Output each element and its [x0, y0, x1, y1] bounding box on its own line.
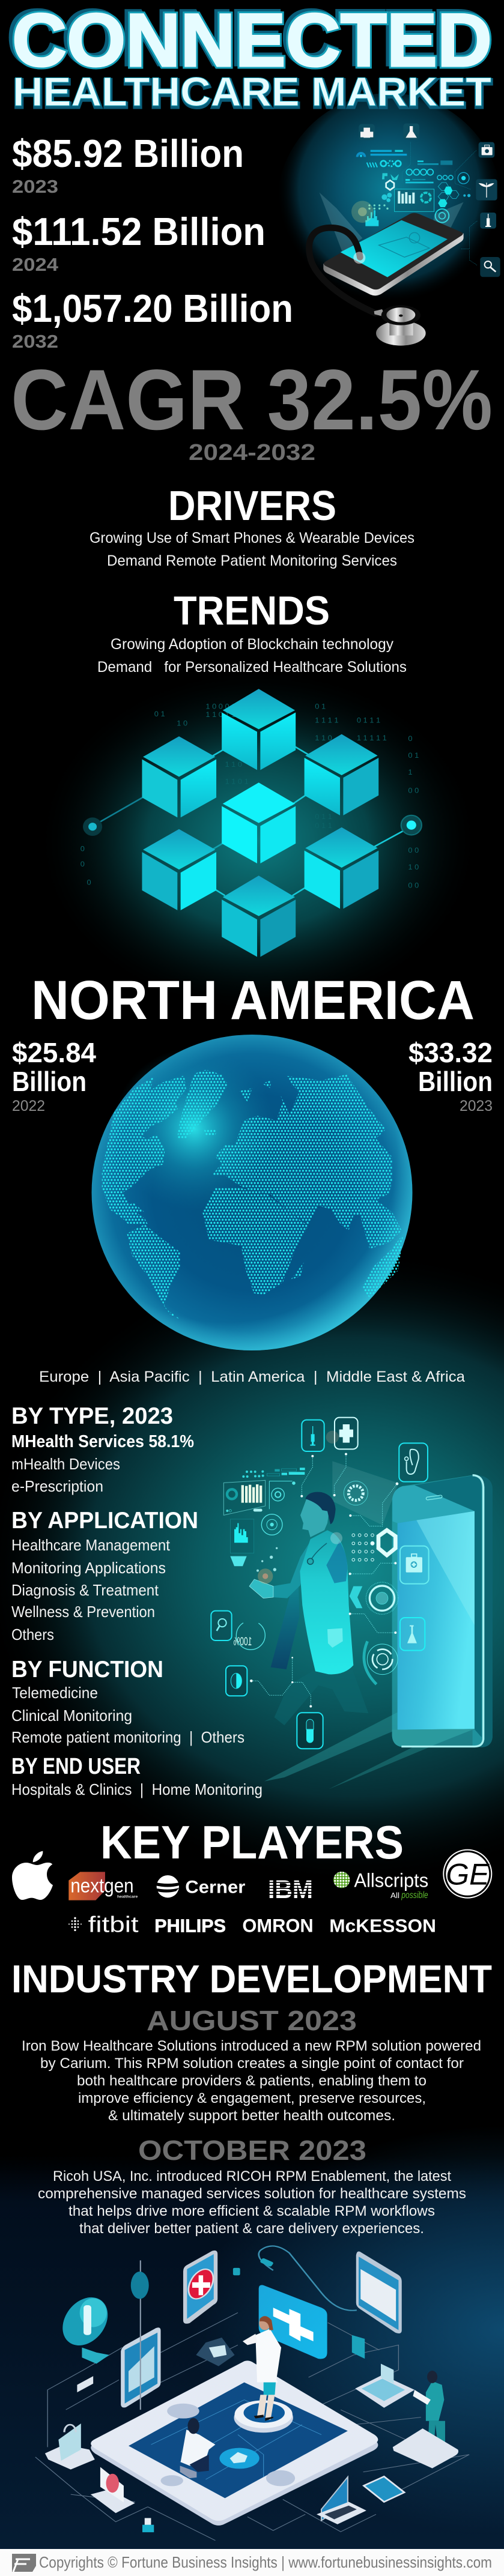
- background glow: phone illustration: [276, 93, 502, 321]
- cube: center: [222, 782, 296, 863]
- tablet platform: [91, 2360, 378, 2526]
- logo: Omron: OMRON: [242, 1915, 314, 1937]
- laptop: [317, 2477, 366, 2524]
- smartphone top face: [324, 213, 463, 289]
- heading: North America: NORTH AMERICA: [31, 970, 475, 1031]
- year 2022: 2022: [12, 1098, 45, 1114]
- icon: syringe: [480, 213, 496, 229]
- segment: e-Prescription: [11, 1477, 103, 1495]
- cube: top: [222, 689, 296, 770]
- August text block: by Carium. This RPM solution creates a single point of contact for: [40, 2055, 464, 2072]
- tablet screen: [129, 2383, 348, 2498]
- footer logo: [12, 2554, 36, 2572]
- title: [8, 0, 492, 116]
- left tablet device: [121, 2327, 160, 2408]
- logo group right: [242, 1850, 491, 1937]
- circuit nodes: [250, 1453, 398, 1708]
- logo: Allscripts: Allscripts: [354, 1870, 428, 1891]
- binary digits: 0 0: [408, 787, 419, 795]
- binary digits: 1 0: [408, 863, 419, 871]
- cube: lower left: [142, 829, 216, 910]
- binary digits: 0: [80, 860, 85, 868]
- icon: half moon: [226, 1666, 247, 1696]
- monitoring device: [196, 2338, 235, 2366]
- illustration: doctor and phone: [211, 1418, 493, 1789]
- binary digits: 1: [408, 768, 413, 776]
- doctor head: [300, 1492, 336, 1537]
- HUD circles: [236, 1481, 398, 1684]
- bar chart panel: [230, 1519, 254, 1553]
- light beams: [320, 193, 362, 252]
- phone glass body: [392, 1475, 485, 1747]
- trend 1: Growing Adoption of Blockchain technology: [111, 636, 393, 653]
- logo: GE: GE: [446, 1858, 490, 1891]
- panel: August 2023 development: [22, 2005, 481, 2124]
- segment: Monitoring Applications: [11, 1559, 166, 1577]
- pedestal: [234, 2400, 293, 2432]
- seated person: [180, 2418, 215, 2478]
- doctor back coat panel: [271, 1577, 299, 1669]
- bottle: [142, 2518, 154, 2532]
- value: North America 2023: [408, 1037, 493, 1114]
- segment: Healthcare Management: [11, 1536, 171, 1554]
- title line: Connected: CONNECTED: [12, 0, 492, 82]
- logo: Apple: [12, 1851, 53, 1900]
- dot matrix: [352, 1534, 374, 1561]
- binary digits: 0 1: [357, 751, 368, 760]
- binary digits: 0: [80, 845, 85, 853]
- icon: caduceus: [476, 179, 497, 201]
- heading: key players: KEY PLAYERS: [100, 1816, 404, 1869]
- tablet shadow spots: [160, 2404, 295, 2486]
- hologram UI elements: [351, 150, 470, 226]
- October text block: Ricoh USA, Inc. introduced RICOH RPM Enablement, the latest: [53, 2168, 451, 2184]
- heading: by type: BY TYPE, 2023: [11, 1403, 173, 1429]
- title line: Connected: CONNECTED: [12, 0, 492, 82]
- phone back edge: [473, 1475, 493, 1747]
- segment: Diagnosis & Treatment: [11, 1581, 159, 1599]
- by application: [11, 1508, 198, 1643]
- date: October 2023: OCTOBER 2023: [138, 2135, 366, 2166]
- dashboard panel: [223, 1480, 266, 1515]
- unit: Billion: [12, 1066, 87, 1097]
- panel: October 2023 development: [38, 2135, 466, 2237]
- CAGR period: 2024-2032: [189, 440, 315, 465]
- doctor legs: [275, 1669, 368, 1725]
- smartphone body: [323, 234, 464, 295]
- year 2023: 2023: [460, 1098, 493, 1114]
- August text block: [22, 2038, 481, 2124]
- logo: NextGen: nextgen: [70, 1875, 134, 1897]
- icon: syringe: [302, 1420, 324, 1451]
- cube: upper right: [305, 734, 378, 815]
- document panel: [356, 2251, 402, 2333]
- illustration: blockchain cubes: [80, 689, 422, 957]
- segment: Others: [11, 1625, 54, 1643]
- title line: Healthcare Market: HEALTHCARE MARKET: [13, 71, 492, 116]
- unit: Billion: [418, 1066, 493, 1097]
- binary digits: 1 1 0: [225, 761, 242, 769]
- node: left: [83, 817, 102, 836]
- October text block: that deliver better patient & care delivery experiences.: [79, 2221, 424, 2237]
- logo: Cerner: [153, 1875, 245, 1897]
- heading: drivers: DRIVERS: [168, 482, 336, 529]
- segment: Telemedicine: [12, 1684, 98, 1702]
- year 2023: 2023: [12, 176, 58, 197]
- background glow: bottom illustration right: [192, 2126, 504, 2534]
- by function: [11, 1657, 244, 1746]
- year 2024: 2024: [12, 254, 59, 275]
- doctor hand: [249, 1579, 273, 1598]
- mark below chart: [230, 1556, 247, 1566]
- icon: stethoscope: [399, 1443, 428, 1482]
- binary digits: 1 1 1 1 1: [357, 734, 387, 742]
- market values: [12, 132, 293, 352]
- October text block: comprehensive managed services solution for healthcare systems: [38, 2186, 466, 2202]
- phone frame highlight: [401, 1475, 484, 1747]
- phone screen: [398, 1511, 475, 1730]
- August text block: both healthcare providers & patients, enabling them to: [77, 2073, 427, 2089]
- stethoscope tubing: [259, 2246, 357, 2311]
- icon: magnifier: [480, 257, 500, 277]
- hexagon gem: [378, 1530, 395, 1555]
- segment: Clinical Monitoring: [11, 1707, 132, 1725]
- logo: Philips: PHILIPS: [154, 1915, 226, 1936]
- phone with red cross: [183, 2251, 218, 2324]
- footer: [0, 2549, 504, 2576]
- segment: Remote patient monitoring | Others: [11, 1728, 244, 1746]
- by type: [11, 1403, 194, 1495]
- icon: medical kit: [400, 1546, 429, 1584]
- binary digits: 0 1: [408, 751, 419, 760]
- logo group left: [12, 1851, 245, 1937]
- C shape mark: [350, 1586, 362, 1608]
- stethoscope chest piece: [374, 305, 426, 346]
- trend 2: Demand for Personalized Healthcare Solutions: [97, 659, 407, 676]
- icon: cross: [335, 1418, 358, 1449]
- leading segment: MHealth Services 58.1%: [11, 1432, 194, 1451]
- logo: Cerner: Cerner: [185, 1877, 245, 1897]
- logo: McKesson: McKESSON: [329, 1915, 436, 1936]
- heading: trends: TRENDS: [174, 588, 330, 633]
- binary digits: 0 1: [315, 703, 326, 710]
- background glow: blockchain: [36, 667, 481, 1015]
- small tablet: [364, 2476, 404, 2502]
- illustration: smartphone with stethoscope: [309, 124, 500, 346]
- footer band: [0, 2549, 504, 2576]
- heading: by end user: BY END USER: [11, 1754, 141, 1779]
- segment: Wellness & Prevention: [11, 1603, 155, 1621]
- binary digits: 0 0: [408, 846, 419, 854]
- illustration: globe: [91, 1035, 412, 1350]
- August text block: & ultimately support better health outcomes.: [108, 2108, 395, 2124]
- binary digits: 0: [87, 878, 91, 887]
- tablet map lines: [151, 2400, 321, 2479]
- small monitor with heart: [91, 2467, 135, 2513]
- circuit lines: [251, 1454, 397, 1707]
- heading: industry development: INDUSTRY DEVELOPMENT: [11, 1957, 492, 2001]
- panel: trends: [97, 588, 407, 676]
- connector lines: [100, 739, 407, 895]
- HUD label: 100%: 100%: [234, 1636, 252, 1648]
- phone top wedge: [392, 1485, 475, 1523]
- nurse platform: [393, 2428, 458, 2469]
- phone bottom glass: [392, 1729, 475, 1747]
- doctor arm: [272, 1541, 311, 1598]
- icon: pill: [297, 1713, 323, 1749]
- other regions list: Europe | Asia Pacific | Latin America | Middle East & Africa: [39, 1368, 465, 1385]
- smartphone screen: [341, 220, 448, 277]
- stethoscope on coat: [308, 1543, 327, 1564]
- logo: Allscripts: All: [390, 1891, 399, 1900]
- panel: segmentation lists: [11, 1403, 263, 1798]
- floor light rays: [264, 1707, 484, 1789]
- globe sphere: [91, 1035, 412, 1350]
- coat sleeve shading: [326, 1541, 347, 1583]
- segment: mHealth Devices: [11, 1455, 120, 1473]
- background: bottom illustration: [0, 2156, 504, 2549]
- binary digits: 0 1 1 1: [357, 716, 380, 724]
- screen highlight: [416, 1511, 475, 1625]
- binary digits: 1 1 0 1 1 0: [205, 710, 242, 719]
- top mini bars: [242, 1468, 305, 1478]
- light ray from phone: [332, 1461, 398, 1525]
- left monitor base: [45, 2423, 95, 2470]
- key player logos: [12, 1850, 491, 1937]
- heading: by application: BY APPLICATION: [11, 1508, 198, 1534]
- title line: Healthcare Market: HEALTHCARE MARKET: [13, 69, 491, 115]
- heading: by function: BY FUNCTION: [11, 1657, 163, 1683]
- binary digits: 0 1 1: [315, 822, 332, 830]
- cube: upper left: [142, 736, 216, 817]
- value: North America 2022: [12, 1037, 96, 1114]
- icon: flask: [403, 124, 419, 139]
- doctor on screen: [379, 232, 430, 257]
- binary digits: 1 1 1 1: [315, 716, 339, 724]
- illustration: connected care platform: [35, 2246, 469, 2541]
- cube: bottom: [222, 875, 296, 957]
- amount 2022: $25.84: [12, 1037, 96, 1068]
- cloud: [55, 2293, 116, 2392]
- IV stand: [131, 2260, 149, 2410]
- binary digits: 0 1 1: [315, 812, 332, 821]
- October text block: [38, 2168, 466, 2237]
- small connectors: [233, 2258, 365, 2359]
- binary digits: 0: [408, 734, 413, 743]
- binary digits: 1 0 0 0 1: [205, 703, 235, 710]
- dotted continents: [102, 1069, 403, 1319]
- date: August 2023: AUGUST 2023: [147, 2005, 357, 2036]
- October text block: that helps drive more efficient & scalable RPM workflows: [68, 2203, 435, 2219]
- circuit lines: [35, 2312, 469, 2541]
- by end user: [11, 1754, 263, 1798]
- glowing map node: [219, 2448, 260, 2469]
- tube highlight: [353, 252, 365, 264]
- logo: Fitbit: fitbit: [88, 1912, 139, 1937]
- binary digits: 0 1: [154, 710, 165, 718]
- right laptop: [355, 2363, 414, 2408]
- value 2032: $1,057.20 Billion: [12, 286, 293, 330]
- stethoscope tube: [309, 228, 375, 313]
- segment: Hospitals & Clinics | Home Monitoring: [11, 1780, 263, 1798]
- phone top dark panel: [414, 1475, 482, 1737]
- value 2024: $111.52 Billion: [12, 210, 266, 253]
- dashed connectors: [402, 142, 477, 265]
- background glow: doctor section: [0, 1249, 504, 1885]
- logo: Fitbit: [68, 1912, 139, 1937]
- icon: cross: [359, 124, 375, 140]
- driver 2: Demand Remote Patient Monitoring Services: [107, 552, 397, 569]
- coat cuff: [327, 1628, 343, 1648]
- binary digits: 0 0: [408, 881, 419, 890]
- August text block: Iron Bow Healthcare Solutions introduced a new RPM solution powered: [22, 2038, 481, 2054]
- binary digits: 1 1 0 1: [225, 778, 249, 785]
- logo: NextGen: healthcare: [117, 1895, 138, 1899]
- icon: magnifier: [211, 1611, 232, 1640]
- globe rim: [91, 1035, 412, 1350]
- August text block: improve efficiency & engagement, preserve resources,: [78, 2090, 426, 2106]
- value 2023: $85.92 Billion: [12, 132, 244, 175]
- amount 2023: $33.32: [408, 1037, 493, 1068]
- logo: IBM: IBM: [268, 1875, 313, 1903]
- binary digits: 1 0: [177, 719, 187, 727]
- logo: Allscripts: possible: [401, 1890, 428, 1900]
- cross panel: [259, 2285, 327, 2359]
- nurse: [413, 2371, 445, 2444]
- cube: lower right: [305, 827, 378, 909]
- standing doctor: [243, 2316, 281, 2421]
- logo: GE: [443, 1850, 491, 1898]
- year 2032: 2032: [12, 331, 58, 352]
- icon: flask: [400, 1618, 425, 1651]
- globe highlight: [113, 1048, 275, 1210]
- hand sparkles: [257, 1431, 342, 1584]
- panel: drivers: [90, 482, 414, 569]
- binary digits: 1 1 0: [315, 734, 332, 742]
- phone speaker: [426, 1495, 442, 1500]
- driver 1: Growing Use of Smart Phones & Wearable Devices: [90, 530, 414, 546]
- node: right: [401, 815, 422, 835]
- icon: medical kit: [479, 142, 494, 158]
- doctor coat: [300, 1530, 353, 1674]
- binary digits: [80, 703, 419, 890]
- logo: Allscripts: [333, 1870, 428, 1900]
